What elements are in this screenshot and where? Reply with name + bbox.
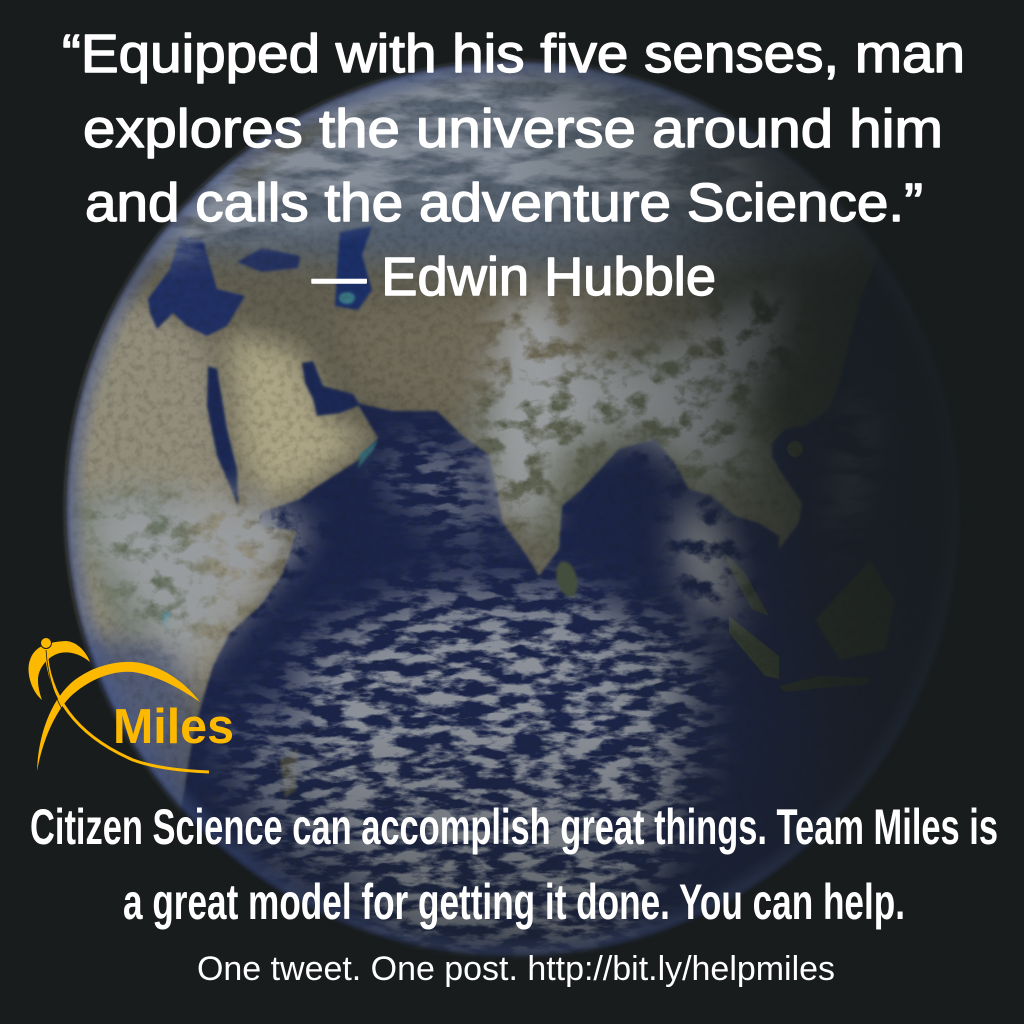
logo small crescent [28,641,90,700]
high cloud band over Europe and Asia [130,70,780,260]
Persian Gulf [302,361,360,416]
Black Sea [237,248,300,272]
Borneo [818,615,826,630]
land colour: northern band [172,70,776,276]
cloud mass over East Africa [75,490,310,670]
land colour: central Asia [342,296,624,411]
quote line 3: and calls the adventure Science.” [85,173,923,233]
southern shading [152,755,804,958]
land colour: Sahara [60,300,280,700]
monsoon streak clouds over Indian Ocean [290,590,700,950]
Java and islands [780,676,834,692]
land colour: equatorial Africa [70,490,210,640]
Caspian Sea [335,226,372,310]
Sri Lanka [555,560,578,598]
Sumatra [729,616,779,679]
Malay Peninsula [725,553,769,616]
link line: One tweet. One post. http://bit.ly/helpmiles [197,950,835,988]
night-side shading [534,65,964,912]
land colour: southern limb [87,624,200,804]
Miles logo [28,638,234,772]
cloud patch off Africa [230,700,330,900]
attribution: — Edwin Hubble [312,247,716,307]
Red Sea [207,366,238,506]
quote line 1: “Equipped with his five senses, man [62,24,965,84]
land colour: north India and China [478,378,566,412]
Pacific cloud wisps [830,380,880,560]
land base [62,58,860,811]
Caspian shallow water [339,292,355,304]
land colour: Arabia [225,330,372,505]
overall dim layer [68,64,724,924]
land colour: east Asia forest [706,275,836,426]
logo large crescent [37,662,200,771]
Mediterranean Sea [148,235,245,336]
call to action [30,799,998,988]
Indian Ocean and Pacific [182,402,940,958]
Madagascar [280,748,298,798]
Hainan [787,441,803,457]
logo swoosh [46,648,209,772]
logo swoosh dark line [46,650,66,716]
cloud mass over India and China [480,280,790,530]
logo wordmark: Miles [113,700,234,754]
logo satellite dot [40,638,52,648]
atmosphere limb glow [64,60,962,958]
quote line 2: explores the universe around him [83,99,943,159]
quote heading [62,24,965,307]
Oman shoal [358,440,378,468]
clouds in Arabian Sea [390,450,490,550]
Lake Victoria [162,611,172,629]
cloud mass over Andaman Sea [680,500,740,630]
surface mottling [73,82,684,782]
